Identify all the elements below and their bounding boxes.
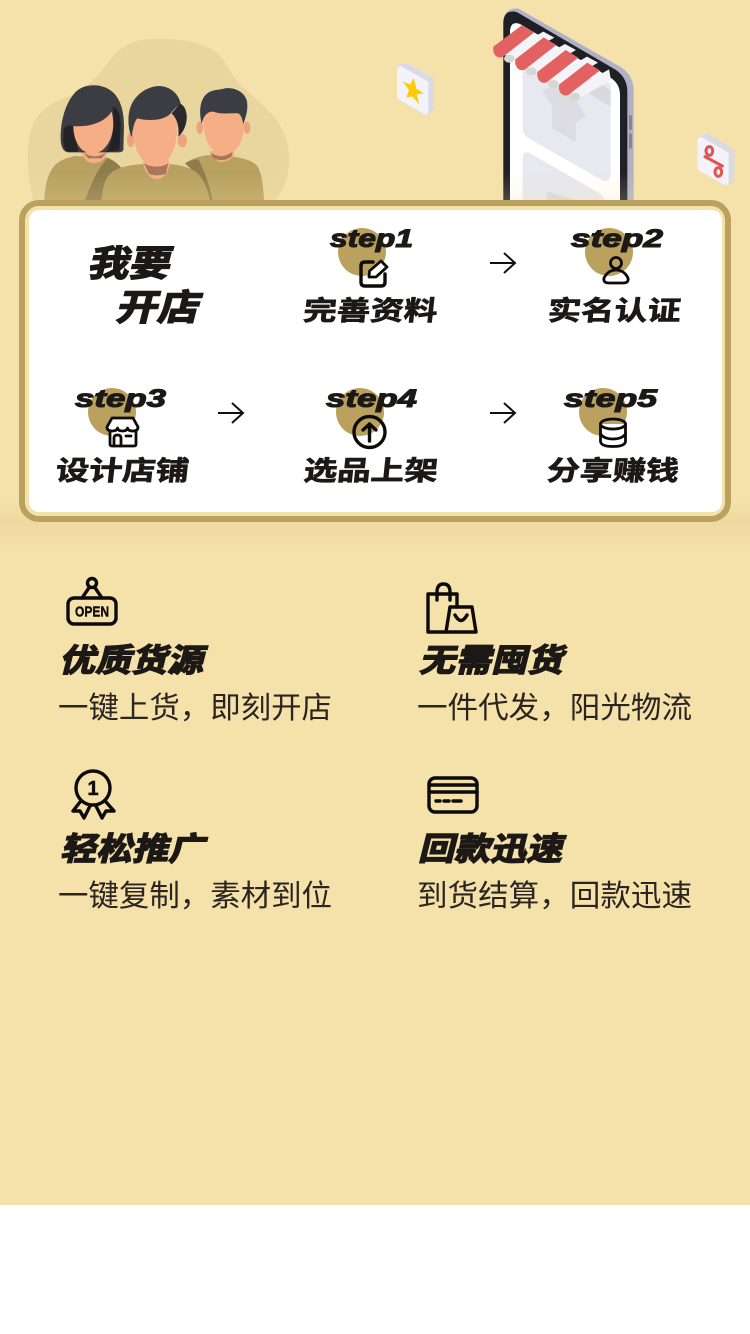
icon: upload bbox=[354, 416, 385, 448]
icon: open sign: OPEN bbox=[75, 604, 109, 620]
icon: edit bbox=[361, 261, 387, 286]
feature: 回款迅速: 到货结算，回款迅速 bbox=[417, 880, 692, 913]
feature: 优质货源: 优质货源 bbox=[57, 643, 210, 678]
icon: medal: 1 bbox=[87, 778, 99, 800]
fade above card bbox=[0, 172, 750, 200]
woman bbox=[44, 85, 124, 200]
panel: steps card bbox=[22, 203, 728, 519]
white footer area bbox=[0, 1205, 750, 1334]
icon: medal bbox=[73, 771, 114, 818]
blob behind people bbox=[28, 39, 289, 200]
illustration: three people bbox=[28, 39, 289, 200]
feature: 轻松推广: 轻松推广 bbox=[58, 831, 211, 867]
icon: database bbox=[600, 419, 626, 446]
icon: open sign bbox=[68, 578, 116, 624]
icon: bank card bbox=[429, 778, 477, 812]
arrow 1 to 2 bbox=[490, 253, 515, 273]
right man bbox=[185, 88, 264, 200]
feature: 回款迅速 bbox=[416, 778, 692, 913]
step 1: step1 bbox=[330, 225, 413, 253]
feature: 轻松推广 bbox=[58, 771, 332, 913]
star tile bbox=[400, 66, 431, 112]
phone body bbox=[503, 9, 634, 200]
arrow 4 to 5 bbox=[490, 403, 515, 423]
soft glow under card bbox=[0, 500, 750, 555]
arrow 3 to 4 bbox=[218, 403, 243, 423]
feature: 无需囤货 bbox=[417, 584, 692, 725]
icon: shopping bags bbox=[428, 584, 476, 632]
illustration: phone storefront bbox=[400, 9, 731, 200]
step 3: step3 bbox=[75, 385, 166, 413]
percent tile bbox=[701, 137, 731, 183]
feature: 无需囤货: 一件代发，阳光物流 bbox=[417, 692, 692, 725]
heading: 我要开店: 我要 bbox=[85, 244, 177, 284]
awning bbox=[493, 25, 611, 101]
feature: 优质货源: 一键上货，即刻开店 bbox=[58, 692, 332, 725]
step 2 bbox=[546, 225, 683, 326]
step 5: 分享赚钱 bbox=[545, 455, 681, 486]
feature: 轻松推广: 一键复制，素材到位 bbox=[58, 880, 332, 913]
heading: 我要开店: 开店 bbox=[113, 288, 206, 328]
icon: person bbox=[604, 258, 628, 283]
step 4 bbox=[302, 385, 440, 486]
step 3 bbox=[54, 385, 191, 486]
center man bbox=[102, 86, 210, 200]
step 4: 选品上架 bbox=[302, 455, 440, 486]
feature: 回款迅速: 回款迅速 bbox=[416, 831, 569, 867]
icon: store bbox=[107, 418, 138, 446]
feature: 优质货源 bbox=[57, 578, 332, 725]
step 4: step4 bbox=[326, 385, 417, 413]
step 5: step5 bbox=[564, 385, 659, 413]
step 2: 实名认证 bbox=[546, 295, 683, 326]
step 1 bbox=[302, 225, 439, 326]
step 5 bbox=[545, 385, 681, 486]
feature: 无需囤货: 无需囤货 bbox=[417, 643, 570, 678]
step 3: 设计店铺 bbox=[54, 455, 191, 486]
step 1: 完善资料 bbox=[302, 295, 439, 326]
heading: 我要开店 bbox=[85, 244, 206, 328]
step 2: step2 bbox=[571, 225, 663, 253]
